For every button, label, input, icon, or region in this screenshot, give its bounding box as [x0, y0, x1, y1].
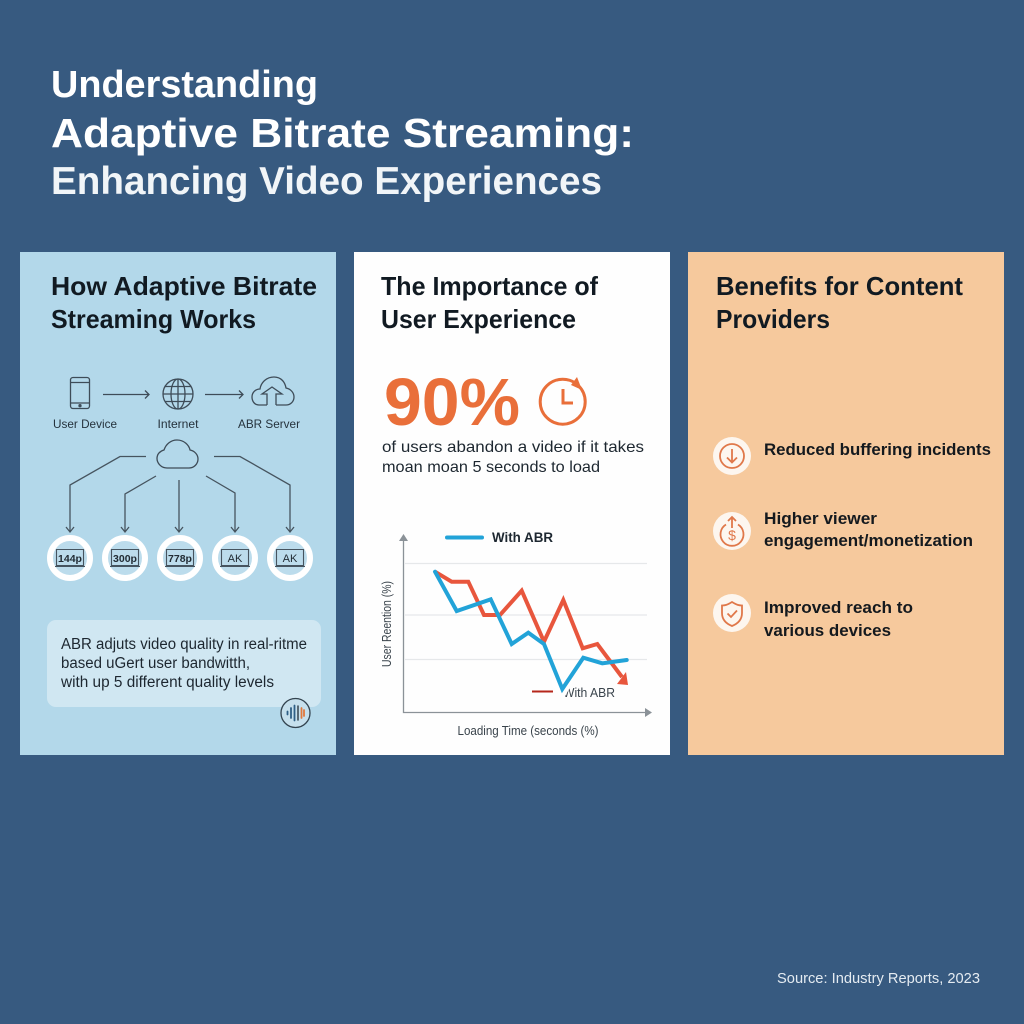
- quality level: 778p: 778p: [168, 553, 192, 565]
- axis arrowheads: [399, 534, 652, 717]
- device labels: Internet: [158, 417, 199, 431]
- statistic: 90%: 90%: [384, 365, 520, 440]
- series: blue line: [435, 572, 627, 692]
- icon: dollar circle: $: [728, 527, 736, 543]
- callout: ABR summary: with up 5 different quality levels: [60, 674, 274, 691]
- arrows: cloud to quality levels: [66, 456, 294, 532]
- x axis label: Loading Time (seconds (%): [458, 724, 598, 738]
- title: Understanding: [51, 64, 318, 106]
- icon: clock: [540, 377, 585, 424]
- device labels: ABR Server: [238, 417, 300, 431]
- panel heading: benefits: Providers: [716, 304, 830, 334]
- chart axes: [404, 537, 650, 712]
- chart gridlines: [405, 564, 647, 660]
- quality level: 300p: [105, 538, 145, 578]
- quality level: 144p: 144p: [58, 553, 82, 565]
- source note: Source: Industry Reports, 2023: [777, 970, 980, 987]
- quality level: 144p: [50, 538, 90, 578]
- legend: with ABR: [447, 530, 553, 545]
- panel heading: user experience: [381, 271, 598, 334]
- icon: distribution cloud: [157, 440, 198, 468]
- icon: upload cloud: [252, 377, 294, 405]
- icon: globe: [163, 379, 193, 409]
- title: Enhancing Video Experiences: [51, 160, 602, 203]
- title: [51, 64, 634, 203]
- quality level: 300p: 300p: [113, 553, 137, 565]
- benefit: improved reach: [713, 594, 913, 640]
- panel heading: user experience: User Experience: [381, 304, 576, 334]
- panel: how adaptive bitrate streaming works: [20, 252, 336, 755]
- panel: benefits for content providers: [688, 252, 1004, 755]
- benefit: reduced buffering: Reduced buffering incidents: [764, 440, 991, 459]
- quality level: AK: AK: [283, 553, 298, 565]
- panel heading: user experience: The Importance of: [381, 271, 598, 301]
- quality level: AK: [270, 538, 310, 578]
- statistic description: moan moan 5 seconds to load: [382, 459, 600, 476]
- benefit: improved reach: Improved reach to: [764, 598, 913, 617]
- panel heading: how it works: How Adaptive Bitrate: [51, 271, 317, 301]
- line chart: retention vs loading time: [380, 530, 652, 738]
- red arrowhead: [617, 672, 628, 685]
- panel heading: benefits: Benefits for Content: [716, 271, 963, 301]
- benefit: reduced buffering: [713, 437, 991, 475]
- benefit: higher engagement: engagement/monetization: [764, 531, 973, 550]
- panel background: blue: [20, 252, 336, 755]
- panel heading: how it works: [51, 271, 317, 334]
- benefit: higher engagement: [713, 509, 973, 550]
- device labels: User Device: [53, 417, 117, 431]
- legend: with ABR: With ABR: [492, 530, 553, 545]
- quality level: AK: [215, 538, 255, 578]
- quality level: AK: AK: [228, 553, 243, 565]
- quality level: 778p: [160, 538, 200, 578]
- icon: phone: [70, 378, 90, 408]
- device labels: [53, 417, 300, 431]
- benefit: higher engagement: Higher viewer: [764, 509, 877, 528]
- callout: ABR summary: [47, 620, 321, 707]
- panel heading: benefits: [716, 271, 963, 334]
- panel: importance of user experience: [354, 252, 670, 755]
- statistic description: of users abandon a video if it takes: [382, 439, 644, 456]
- arrow: device to internet: [103, 390, 149, 398]
- callout: ABR summary: ABR adjuts video quality in real-ritme: [61, 636, 307, 653]
- icon: dollar circle: [713, 512, 751, 550]
- benefit: improved reach: various devices: [764, 621, 891, 640]
- icon: sound wave badge: [281, 698, 310, 728]
- series: red line: [435, 572, 622, 677]
- arrow: internet to server: [205, 390, 243, 398]
- callout: ABR summary: based uGert user bandwitth,: [61, 655, 250, 672]
- statistic description: [382, 439, 644, 476]
- icon: download circle: [713, 437, 751, 475]
- panel heading: how it works: Streaming Works: [51, 304, 256, 334]
- y axis label: User Reention (%): [380, 581, 394, 667]
- legend: lower label: With ABR: [563, 686, 615, 700]
- legend: lower label: [532, 686, 615, 700]
- panel background: white: [354, 252, 670, 755]
- panel background: orange: [688, 252, 1004, 755]
- title: Adaptive Bitrate Streaming:: [51, 110, 634, 156]
- icon: shield check: [713, 594, 751, 632]
